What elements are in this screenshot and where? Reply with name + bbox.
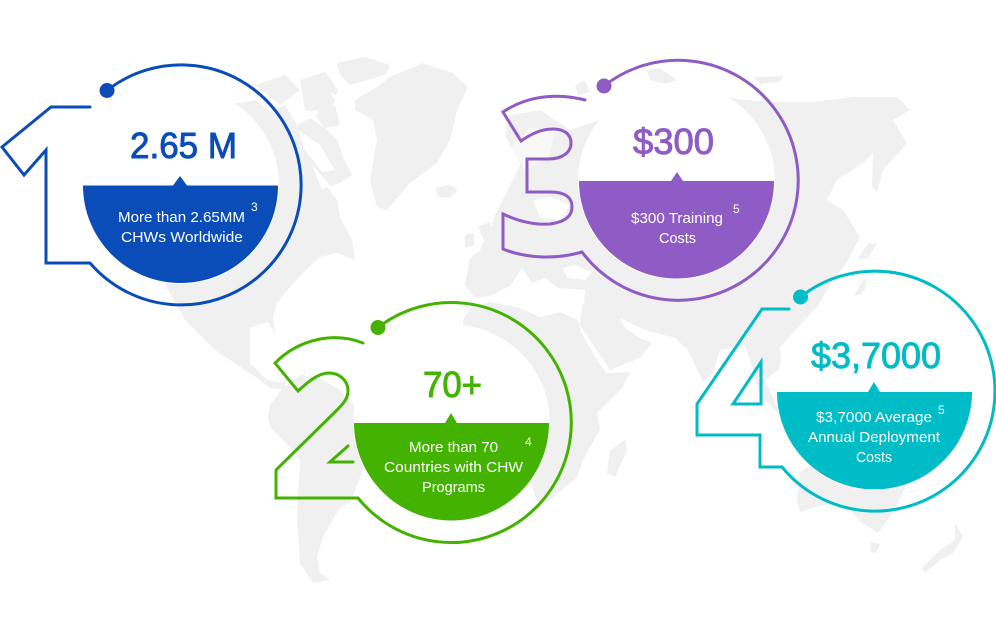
headline value: $3,7000 — [811, 335, 941, 376]
ring dot — [370, 320, 386, 335]
description: More than 2.65MM — [118, 210, 245, 226]
numeral four outline with ring — [697, 271, 995, 511]
ring dot — [100, 83, 114, 98]
sea: arctic channels and hudson bay — [298, 92, 345, 190]
numeral three outline with ring — [503, 60, 798, 300]
map: africa — [463, 302, 630, 502]
white disc 1 — [82, 87, 279, 284]
sea: black sea — [562, 265, 592, 280]
sea: mediterranean — [465, 268, 585, 312]
footnote number: 4 — [525, 435, 532, 449]
map: eurasia — [465, 90, 910, 425]
map: madagascar — [607, 440, 627, 477]
inner notch of numeral two — [330, 446, 353, 462]
map: arctic islands — [255, 57, 390, 128]
inner triangle of numeral four — [733, 362, 761, 404]
numeral two outline with ring — [275, 303, 571, 543]
sea: white sea and north bay — [508, 128, 555, 170]
seas cut out of the map — [298, 92, 592, 312]
card 1: community health workers worldwide — [2, 65, 301, 305]
map: new zealand — [922, 523, 963, 573]
headline value: 2.65 M — [130, 125, 237, 166]
background world map — [160, 57, 910, 583]
description: CHWs Worldwide — [121, 230, 243, 246]
sea: baltic — [533, 197, 570, 220]
card 4: annual deployment costs — [697, 271, 995, 511]
ring dot — [596, 78, 612, 94]
map: iceland — [435, 185, 458, 198]
map: tasmania — [870, 542, 880, 553]
white disc 2 — [353, 324, 550, 522]
half disc with pointer — [83, 176, 278, 283]
description: Programs — [422, 480, 485, 496]
half disc with pointer — [354, 413, 549, 521]
headline value: $300 — [633, 121, 714, 162]
description: Costs — [659, 231, 696, 247]
map: britain and ireland — [465, 222, 497, 256]
description: Costs — [856, 450, 892, 466]
footnote number: 5 — [938, 403, 945, 417]
white disc 4 — [776, 294, 973, 490]
card 2: countries with programs — [275, 303, 571, 543]
map: australia — [797, 462, 905, 533]
description: $3,7000 Average — [816, 410, 932, 426]
headline value: 70+ — [423, 364, 482, 405]
map: japan — [853, 243, 877, 299]
map: polar islands of eurasia — [575, 68, 783, 95]
card 3: training costs — [503, 60, 798, 300]
map: south america — [268, 375, 365, 583]
white disc 3 — [578, 82, 775, 280]
footnote number: 5 — [733, 202, 740, 216]
numeral one outline with ring — [2, 65, 301, 305]
map: north america — [160, 100, 355, 390]
description: Annual Deployment — [808, 430, 940, 446]
map: greenland — [355, 63, 468, 210]
description: Countries with CHW — [384, 460, 523, 476]
description: More than 70 — [409, 440, 498, 456]
footnote number: 3 — [251, 200, 258, 214]
ring dot — [793, 290, 808, 304]
description: $300 Training — [631, 211, 723, 227]
half disc with pointer — [777, 382, 972, 489]
half disc with pointer — [579, 172, 774, 278]
